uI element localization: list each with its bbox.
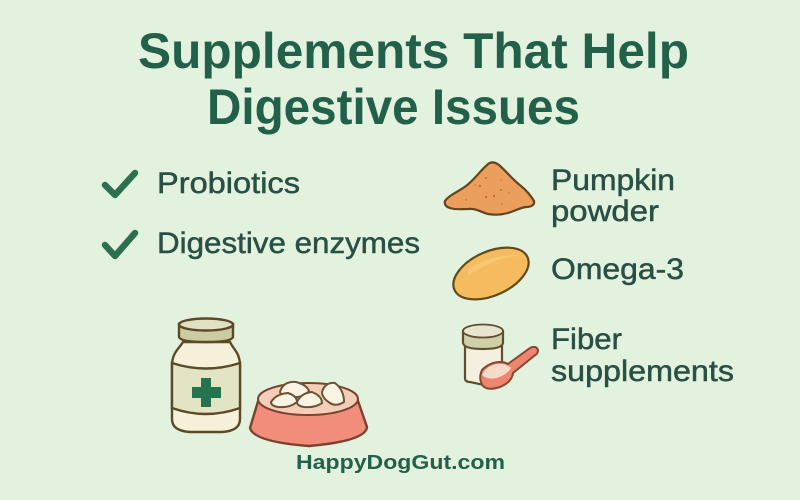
icon: supplement bottle [172,318,240,432]
label: probiotics: Probiotics [157,167,300,200]
icon: fiber jar and scoop [463,324,538,389]
label: pumpkin powder: Pumpkin [551,164,675,197]
label: fiber supplements: supplements [551,355,734,388]
title: Supplements That Help [138,23,689,79]
label: pumpkin powder [551,164,675,228]
icon: omega-3 capsule [446,237,536,310]
footer website: HappyDogGut.com [296,452,505,474]
label: pumpkin powder: powder [551,195,659,228]
title: Digestive Issues [207,79,580,135]
icon: pumpkin powder pile [445,162,534,215]
label: digestive enzymes: Digestive enzymes [157,227,420,260]
icon: check mark probiotics [105,173,135,195]
title [138,23,689,135]
label: fiber supplements [551,323,734,388]
icon: dog food bowl [250,382,367,446]
label: omega-3: Omega-3 [551,253,684,286]
icon: check mark digestive enzymes [105,233,135,256]
label: fiber supplements: Fiber [551,323,622,356]
